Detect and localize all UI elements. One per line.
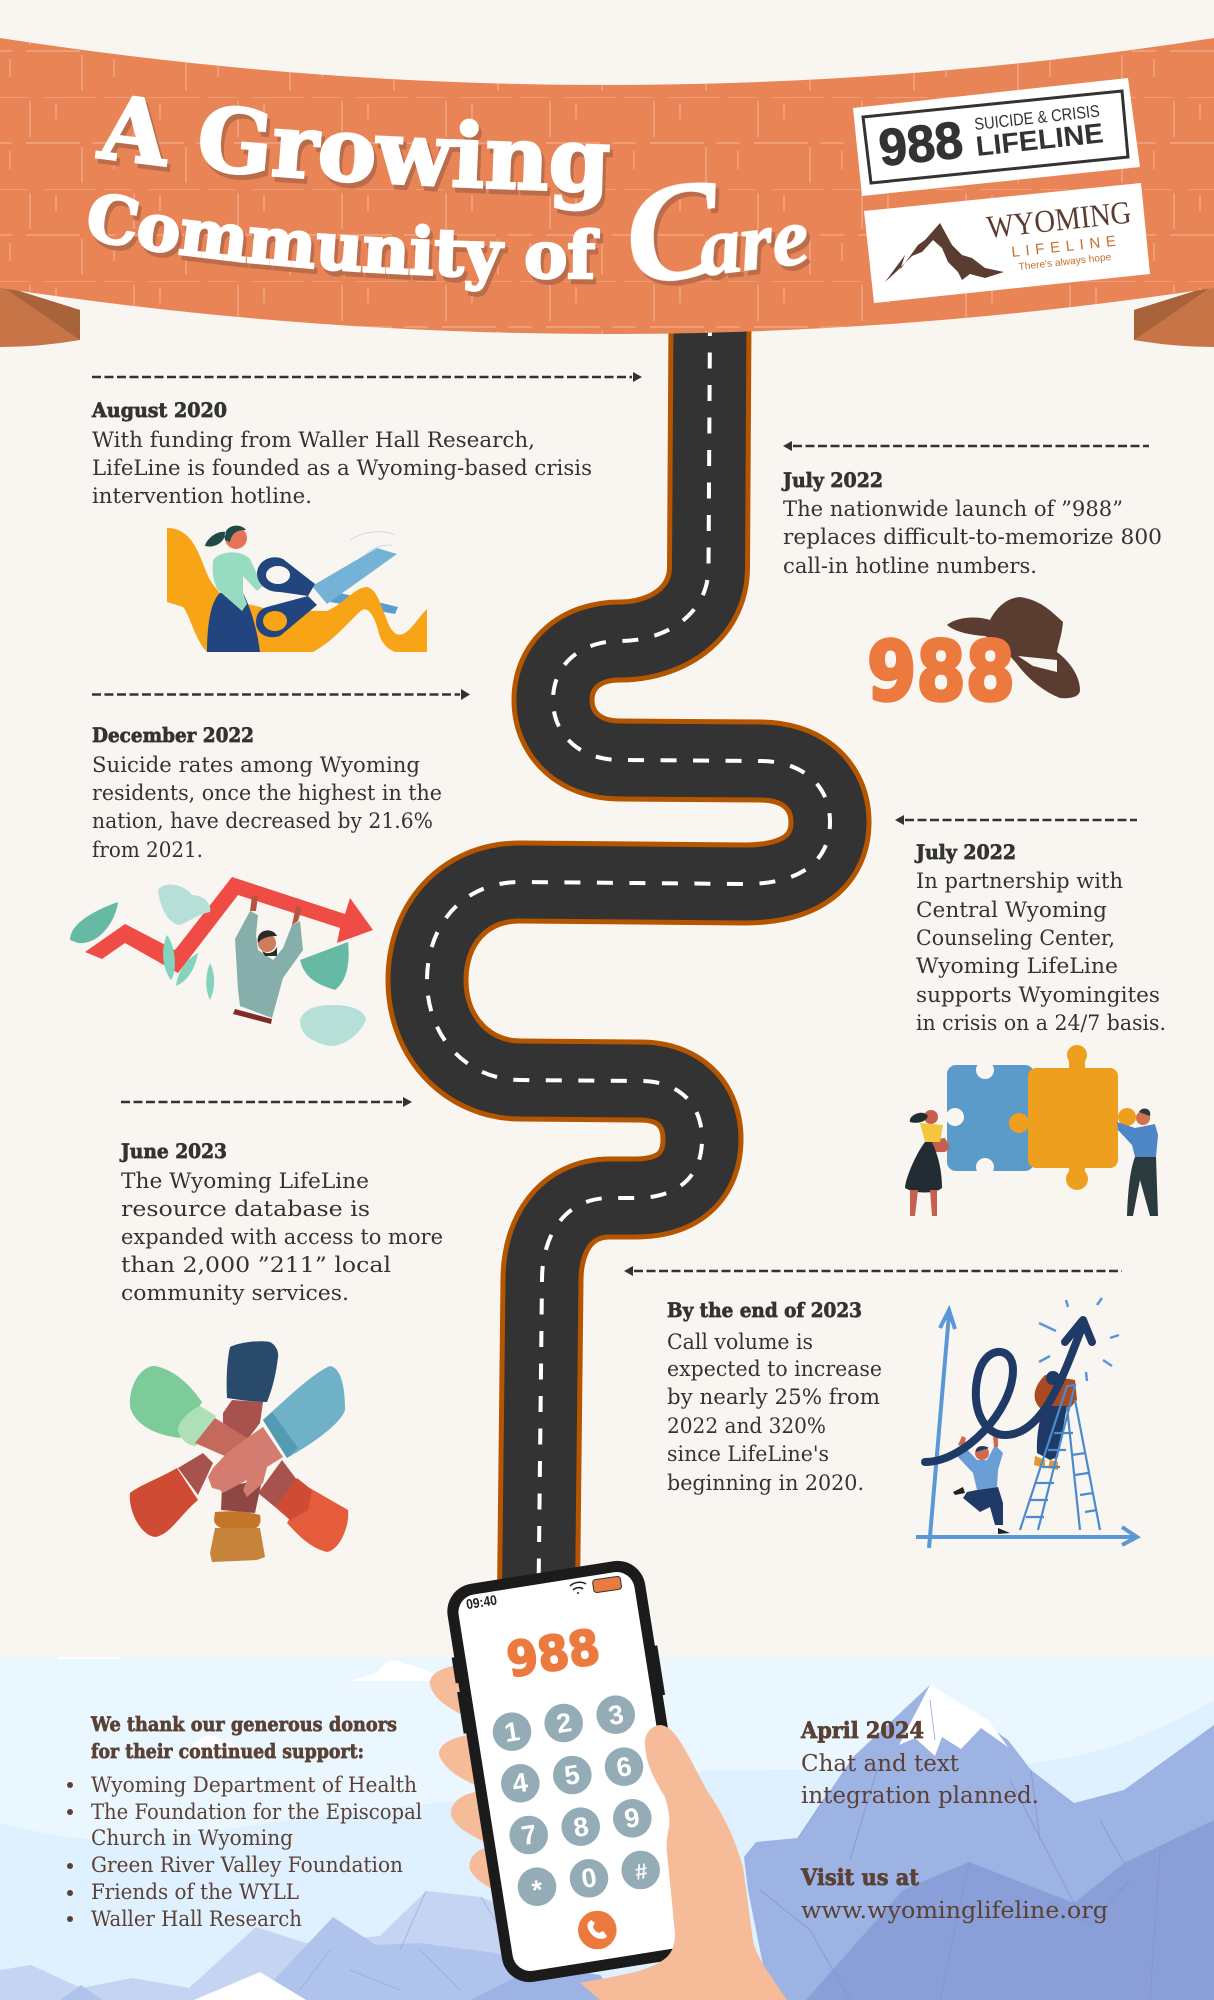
body text: since LifeLine's <box>667 1442 829 1467</box>
body text: The nationwide launch of ”988” <box>783 497 1123 522</box>
donors list: Church in Wyoming <box>91 1826 293 1851</box>
timeline: August 2020 <box>91 372 642 652</box>
body text: The Wyoming LifeLine <box>121 1169 369 1194</box>
icon: man lifting red arrow <box>70 877 373 1046</box>
body text: call-in hotline numbers. <box>783 554 1037 579</box>
footer mountain scene <box>0 1657 1214 2000</box>
arrow <box>92 372 642 382</box>
title: A Growing <box>94 96 613 216</box>
keypad: 6 <box>614 1751 634 1783</box>
footer note: April 2024 <box>800 1718 1039 1809</box>
footer note: website <box>800 1865 1108 1924</box>
body text: In partnership with <box>916 869 1123 894</box>
body text <box>121 1169 443 1306</box>
battery icon <box>592 1576 622 1593</box>
body text: Counseling Center, <box>916 926 1115 951</box>
timeline: July 2022 nationwide launch <box>781 441 1162 720</box>
logo: 988 lifeline: LIFELINE <box>974 117 1105 162</box>
call button <box>578 1911 617 1949</box>
heading: By the end of 2023 <box>667 1298 862 1322</box>
donors list: Waller Hall Research <box>91 1907 302 1932</box>
body text <box>92 753 442 863</box>
keypad: * <box>530 1874 545 1906</box>
body text: Wyoming LifeLine <box>916 954 1118 979</box>
phone number: 988 <box>503 1619 604 1689</box>
logo: 988 lifeline: SUICIDE & CRISIS <box>973 101 1101 134</box>
arrow <box>895 815 1137 825</box>
logo: wyoming lifeline <box>864 183 1150 303</box>
keypad: 3 <box>606 1699 626 1731</box>
title <box>88 96 815 315</box>
icon: stacked hands <box>130 1341 348 1562</box>
body text: intervention hotline. <box>92 484 312 509</box>
donors heading: We thank our generous donors <box>90 1712 397 1736</box>
arrow <box>121 1097 412 1107</box>
body text: residents, once the highest in the <box>92 781 442 806</box>
logo: wyoming lifeline: WYOMING <box>985 194 1133 245</box>
body text: With funding from Waller Hall Research, <box>92 428 535 453</box>
body text: Call volume is <box>667 1330 813 1355</box>
logo: 988 lifeline <box>853 78 1140 196</box>
wifi icon <box>570 1582 586 1593</box>
banner <box>0 38 1214 334</box>
keypad: 7 <box>519 1819 539 1851</box>
icon: 988 with cowboy hat <box>867 597 1080 720</box>
logo: wyoming lifeline: LIFELINE <box>1011 233 1117 261</box>
body text: from 2021. <box>92 838 203 863</box>
keypad: 2 <box>554 1707 574 1739</box>
icon: growth chart with climbers <box>916 1298 1137 1548</box>
banner tails <box>0 285 1214 347</box>
heading: August 2020 <box>91 398 227 422</box>
keypad: 5 <box>562 1759 582 1791</box>
footer note: April 2024: April 2024 <box>800 1718 924 1744</box>
body text: expanded with access to more <box>121 1225 443 1250</box>
phone body <box>443 1557 704 1986</box>
timeline: July 2022 partnership <box>895 815 1166 1216</box>
body text: 2022 and 320% <box>667 1414 826 1439</box>
body text: expected to increase <box>667 1357 882 1382</box>
donors list: Wyoming Department of Health <box>91 1773 417 1798</box>
timeline: June 2023 <box>119 1097 443 1562</box>
donors list: The Foundation for the Episcopal <box>91 1800 422 1825</box>
body text: supports Wyomingites <box>916 983 1160 1008</box>
donors list <box>67 1773 422 1932</box>
arrow <box>624 1266 1122 1276</box>
title: Care <box>617 139 815 315</box>
body text: nation, have decreased by 21.6% <box>92 809 433 834</box>
footer note: website: www.wyominglifeline.org <box>801 1898 1108 1924</box>
body text <box>667 1330 882 1496</box>
body text: Suicide rates among Wyoming <box>92 753 420 778</box>
body text: community services. <box>121 1281 349 1306</box>
timeline: December 2022 <box>70 689 470 1046</box>
body text: than 2,000 ”211” local <box>121 1253 391 1278</box>
keypad: # <box>633 1858 649 1885</box>
body text: resource database is <box>121 1197 370 1222</box>
body text: beginning in 2020. <box>667 1471 864 1496</box>
body text <box>916 869 1166 1036</box>
body text: Central Wyoming <box>916 898 1107 923</box>
keypad: 0 <box>579 1862 599 1894</box>
body text: by nearly 25% from <box>667 1385 880 1410</box>
keypad: 9 <box>622 1802 642 1834</box>
road <box>427 320 830 1640</box>
arrow <box>783 441 1149 451</box>
timeline: By the end of 2023 <box>624 1266 1137 1548</box>
icon: puzzle pieces and people <box>905 1045 1158 1216</box>
logo: wyoming lifeline: There's always hope <box>1018 252 1112 273</box>
keypad: 1 <box>502 1716 522 1748</box>
phone <box>441 1556 706 1987</box>
body text <box>783 497 1162 579</box>
donors heading <box>90 1712 397 1763</box>
icon: 988 with cowboy hat: 988 <box>867 625 1015 720</box>
heading: July 2022 <box>914 840 1016 864</box>
body text: replaces difficult-to-memorize 800 <box>783 525 1162 550</box>
heading: June 2023 <box>119 1139 227 1163</box>
keypad: 4 <box>510 1767 530 1799</box>
arrow <box>92 689 470 700</box>
heading: December 2022 <box>92 723 254 747</box>
icon: ribbon cutting <box>167 526 427 652</box>
body text: in crisis on a 24/7 basis. <box>916 1011 1166 1036</box>
heading: July 2022 <box>781 468 883 492</box>
donors list: Friends of the WYLL <box>91 1880 299 1905</box>
footer note: April 2024: Chat and text <box>801 1751 960 1777</box>
body text <box>92 428 592 509</box>
fingers <box>430 1665 494 1890</box>
footer note: website: Visit us at <box>800 1865 920 1891</box>
logo: 988 lifeline: 988 <box>876 111 966 178</box>
title: Community of <box>88 194 603 297</box>
keypad: 8 <box>571 1811 591 1843</box>
hand holding phone <box>580 1725 787 2000</box>
screen <box>456 1569 691 1974</box>
body text: LifeLine is founded as a Wyoming-based crisis <box>92 456 592 481</box>
keypad <box>493 1695 660 1906</box>
footer note: April 2024: integration planned. <box>801 1783 1039 1809</box>
donors <box>67 1712 422 1932</box>
status time: 09:40 <box>465 1592 498 1612</box>
donors heading: for their continued support: <box>91 1739 364 1763</box>
donors list: Green River Valley Foundation <box>91 1853 403 1878</box>
